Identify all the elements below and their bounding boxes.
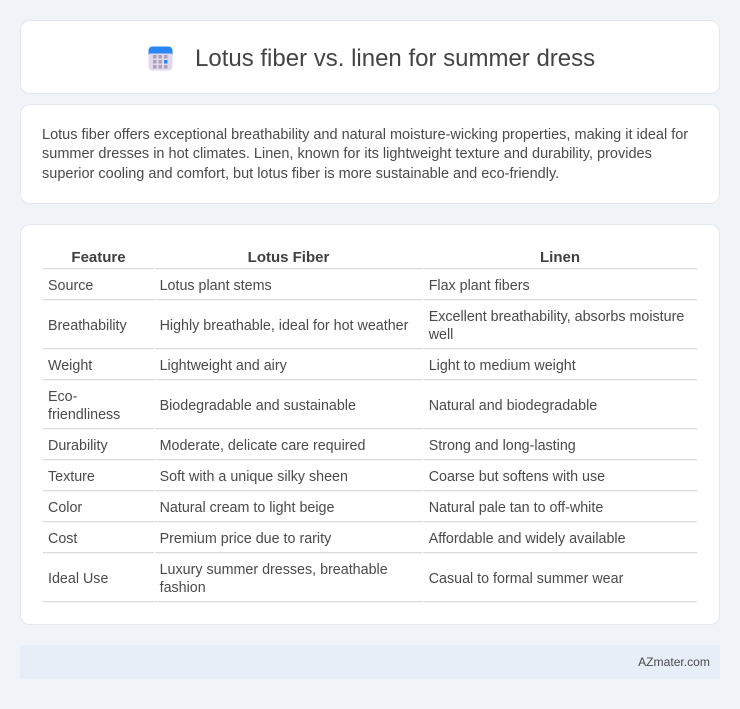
row: durability xyxy=(43,438,697,460)
row: durability: Durability xyxy=(48,438,108,454)
row: eco-friendliness: friendliness xyxy=(48,407,120,423)
row: source: Lotus plant stems xyxy=(160,278,272,294)
footer bar xyxy=(20,645,720,679)
row: texture xyxy=(43,469,697,492)
row: ideal use: fashion xyxy=(160,580,206,596)
row: breathability: Breathability xyxy=(48,318,127,334)
row: breathability: Highly breathable, ideal for hot weather xyxy=(160,318,408,334)
row: ideal use xyxy=(43,562,697,602)
row: weight: Lightweight and airy xyxy=(160,358,287,374)
summary text: Lotus fiber offers exceptional breathability and natural moisture-wicking properties, making it ideal for xyxy=(42,126,688,142)
row: weight: Weight xyxy=(48,358,92,374)
row: cost xyxy=(43,531,697,554)
row: eco-friendliness: Biodegradable and sustainable xyxy=(160,398,356,414)
row: eco-friendliness xyxy=(43,389,697,430)
row: breathability: Excellent breathability, absorbs moisture xyxy=(429,309,684,325)
comparison table panel xyxy=(20,224,720,625)
row: texture: Coarse but softens with use xyxy=(429,469,605,485)
icon: calendar xyxy=(148,46,172,70)
row: ideal use: Ideal Use xyxy=(48,571,108,587)
row: color: Natural cream to light beige xyxy=(160,500,334,516)
summary text xyxy=(42,126,688,182)
row: source: Source xyxy=(48,278,93,294)
header row: Feature xyxy=(71,249,126,266)
footer credit: AZmater.com xyxy=(638,655,710,669)
title: Lotus fiber vs. linen for summer dress xyxy=(195,45,595,72)
row: source: Flax plant fibers xyxy=(429,278,530,294)
row: eco-friendliness: Natural and biodegradable xyxy=(429,398,597,414)
row: durability: Moderate, delicate care required xyxy=(160,438,365,454)
row: cost: Premium price due to rarity xyxy=(160,531,331,547)
header row: Lotus Fiber xyxy=(248,249,329,266)
summary panel xyxy=(20,104,720,204)
row: color: Color xyxy=(48,500,82,516)
header row: Linen xyxy=(540,249,580,266)
row: weight xyxy=(43,358,697,380)
row: color xyxy=(43,500,697,522)
row: cost: Cost xyxy=(48,531,77,547)
title panel xyxy=(20,20,720,94)
row: texture: Soft with a unique silky sheen xyxy=(160,469,348,485)
summary text: superior cooling and comfort, but lotus fiber is more sustainable and eco-friendly. xyxy=(42,166,559,182)
row: texture: Texture xyxy=(48,469,95,485)
row: ideal use: Casual to formal summer wear xyxy=(429,571,623,587)
row: durability: Strong and long-lasting xyxy=(429,438,576,454)
row: breathability: well xyxy=(429,327,453,343)
comparison table xyxy=(43,249,697,602)
summary text: summer dresses in hot climates. Linen, known for its lightweight texture and durability, provides xyxy=(42,146,652,162)
row: cost: Affordable and widely available xyxy=(429,531,626,547)
row: eco-friendliness: Eco- xyxy=(48,389,77,405)
row: source xyxy=(43,278,697,300)
row: color: Natural pale tan to off-white xyxy=(429,500,603,516)
header row xyxy=(43,249,697,270)
row: breathability xyxy=(43,309,697,350)
row: weight: Light to medium weight xyxy=(429,358,576,374)
row: ideal use: Luxury summer dresses, breathable xyxy=(160,562,388,578)
